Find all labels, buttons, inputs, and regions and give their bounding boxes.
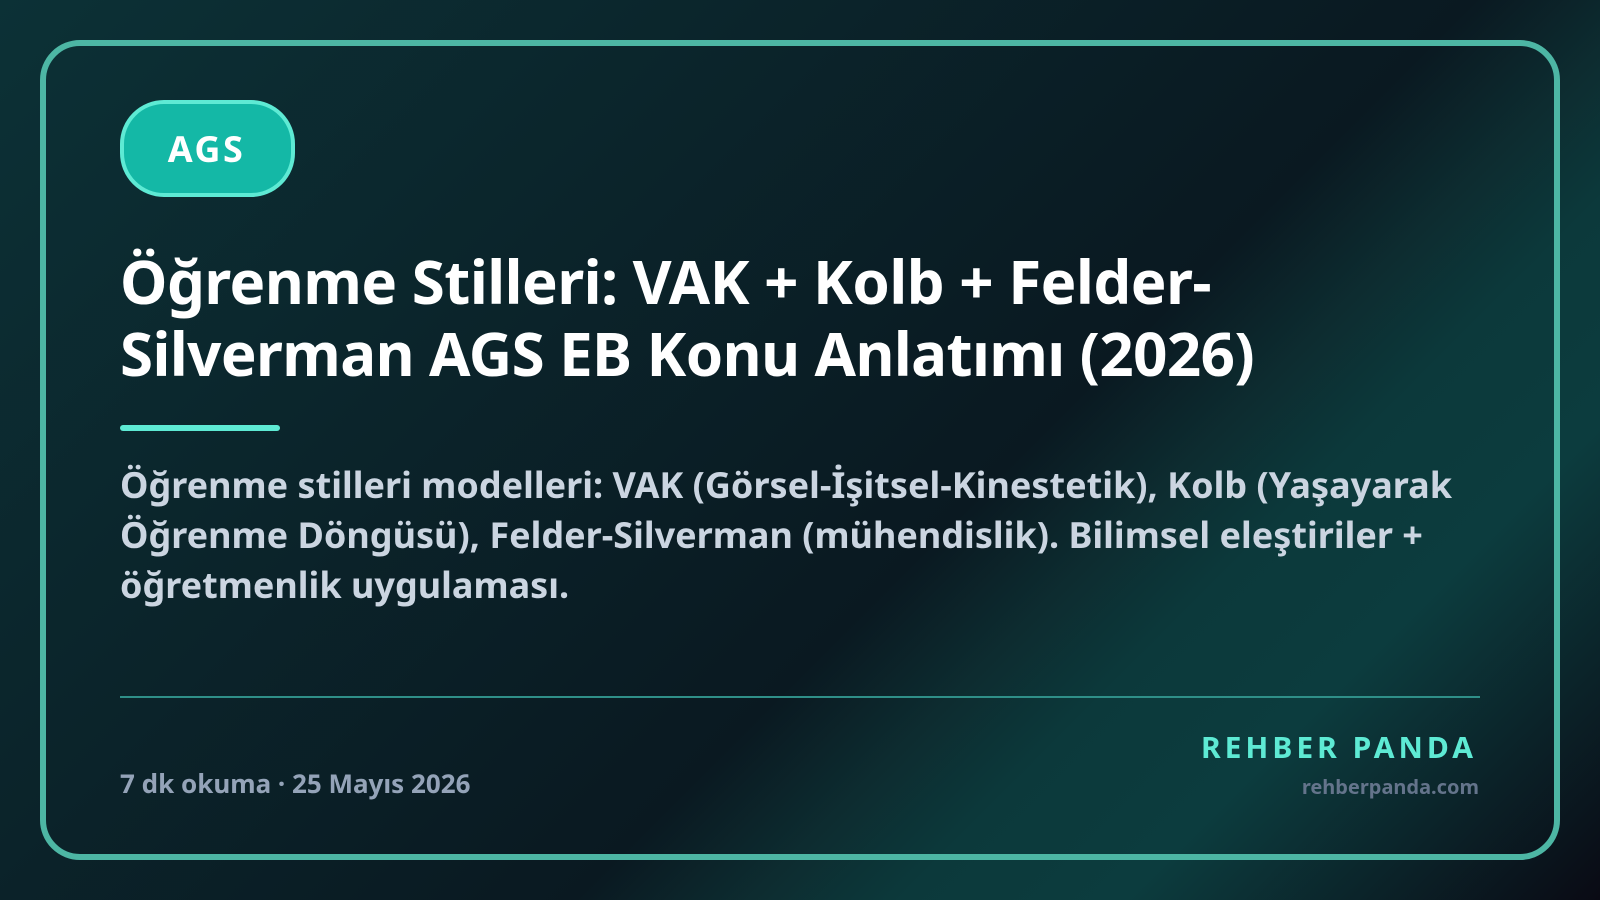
subtitle bbox=[120, 460, 1452, 609]
accent bar bbox=[120, 425, 280, 431]
badge: AGS bbox=[120, 100, 295, 197]
brand url: rehberpanda.com bbox=[1302, 773, 1479, 800]
subtitle: öğretmenlik uygulaması. bbox=[120, 560, 569, 609]
subtitle: Öğrenme Döngüsü), Felder-Silverman (mühendislik). Bilimsel eleştiriler + bbox=[120, 510, 1423, 559]
subtitle: Öğrenme stilleri modelleri: VAK (Görsel-İşitsel-Kinestetik), Kolb (Yaşayarak bbox=[120, 460, 1452, 509]
title bbox=[120, 240, 1254, 394]
meta: reading time and date: 7 dk okuma · 25 Mayıs 2026 bbox=[120, 765, 470, 801]
title: Silverman AGS EB Konu Anlatımı (2026) bbox=[120, 312, 1254, 394]
title: Öğrenme Stilleri: VAK + Kolb + Felder- bbox=[120, 240, 1211, 322]
brand: Rehber Panda: REHBER PANDA bbox=[1201, 726, 1477, 767]
badge: AGS: AGS bbox=[168, 124, 245, 173]
divider bbox=[120, 696, 1480, 698]
